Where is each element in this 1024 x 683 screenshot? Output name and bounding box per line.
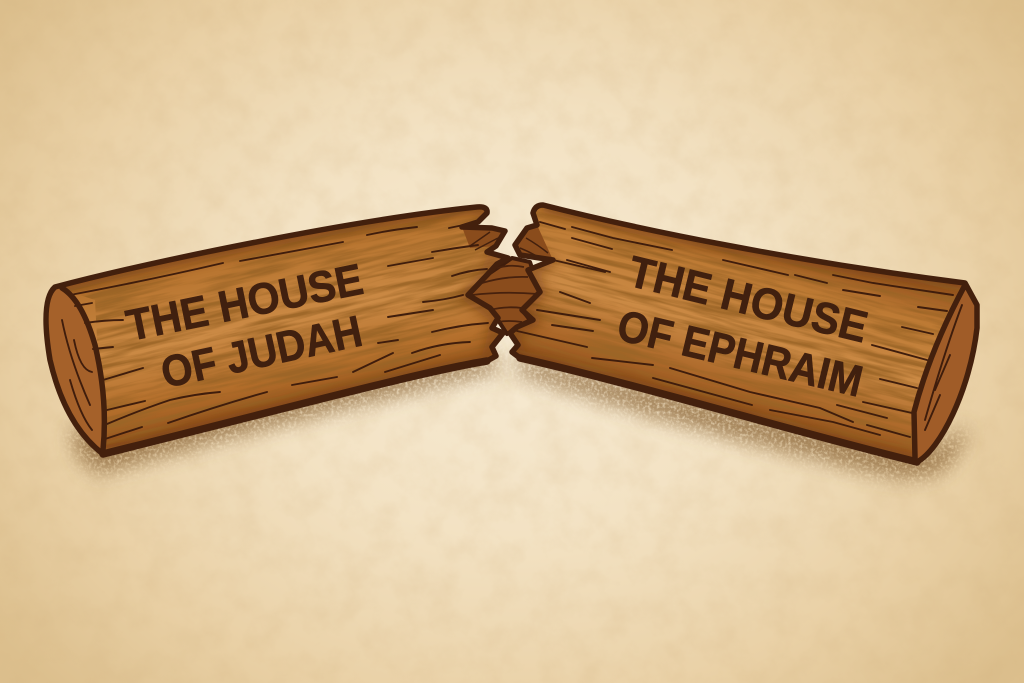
right log end cap	[914, 285, 977, 460]
ground shadow: right log	[515, 355, 970, 478]
right log wood grain	[514, 208, 962, 456]
label: The House of Ephraim: THE HOUSE	[624, 247, 872, 353]
label: The House of Judah: THE HOUSE	[122, 255, 367, 351]
ground shadow: left log	[70, 352, 500, 474]
left log outline	[46, 207, 508, 454]
label: The House of Judah: OF JUDAH	[157, 307, 367, 398]
right log end rim	[914, 285, 965, 458]
left log end rim	[62, 288, 104, 450]
log: The House of Ephraim	[508, 202, 980, 466]
right log outline	[510, 205, 977, 462]
left log wood grain	[66, 210, 501, 448]
right log bottom edge	[520, 358, 917, 462]
left log bottom edge	[103, 361, 487, 454]
left log end cap	[45, 287, 104, 452]
label: The House of Ephraim: OF EPHRAIM	[613, 301, 867, 407]
break junction splinters	[468, 258, 540, 334]
log: The House of Judah	[43, 204, 510, 458]
left log body	[46, 207, 508, 454]
left log cracks	[62, 222, 488, 439]
label: The House of Ephraim	[613, 247, 872, 407]
label: The House of Judah	[122, 255, 367, 398]
right log cracks	[517, 222, 962, 437]
right log body	[510, 205, 977, 462]
